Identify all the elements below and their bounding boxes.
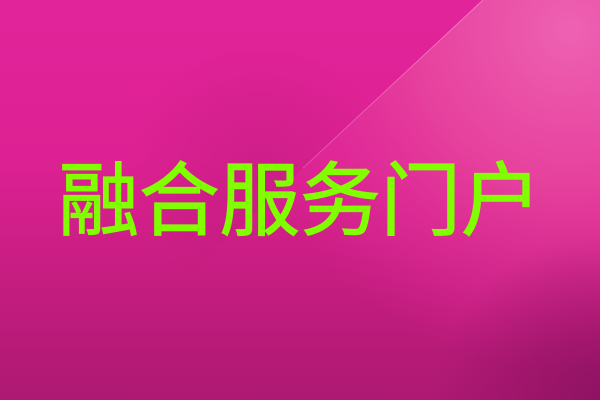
title: 融合服务门户 <box>58 157 542 247</box>
